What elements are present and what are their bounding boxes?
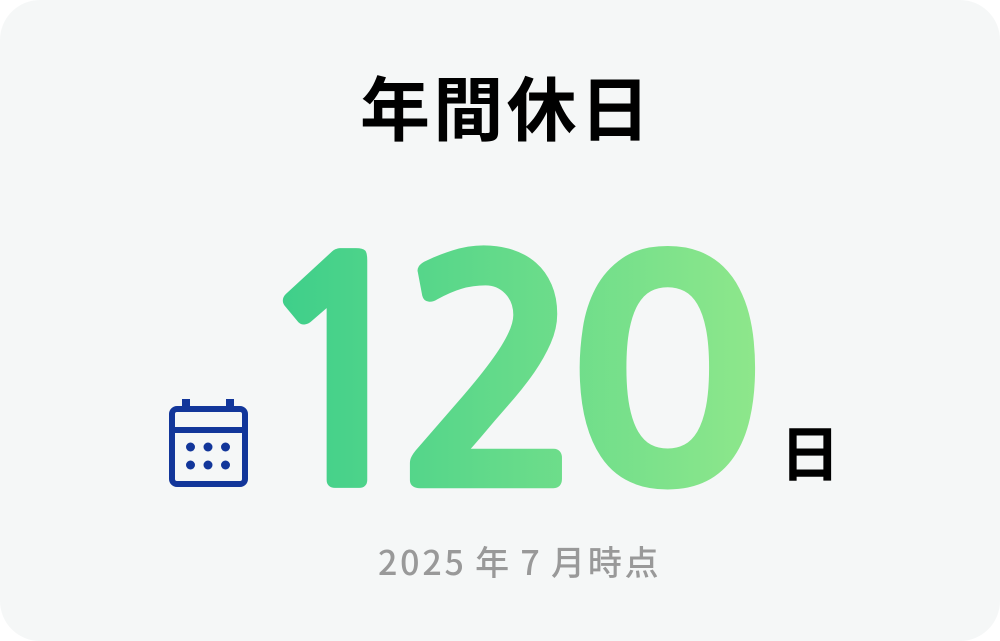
icon: calendar xyxy=(172,399,245,484)
big number: 120 xyxy=(248,226,767,529)
big number: 120: 2 xyxy=(396,227,586,529)
unit: days: 日 xyxy=(780,407,840,494)
title: 年間休日 xyxy=(360,55,653,156)
big number: 120: 1 xyxy=(248,227,433,529)
footnote: as of July 2025: 2025 年 7 月時点 xyxy=(378,536,661,585)
big number: 120: 0 xyxy=(565,226,767,529)
